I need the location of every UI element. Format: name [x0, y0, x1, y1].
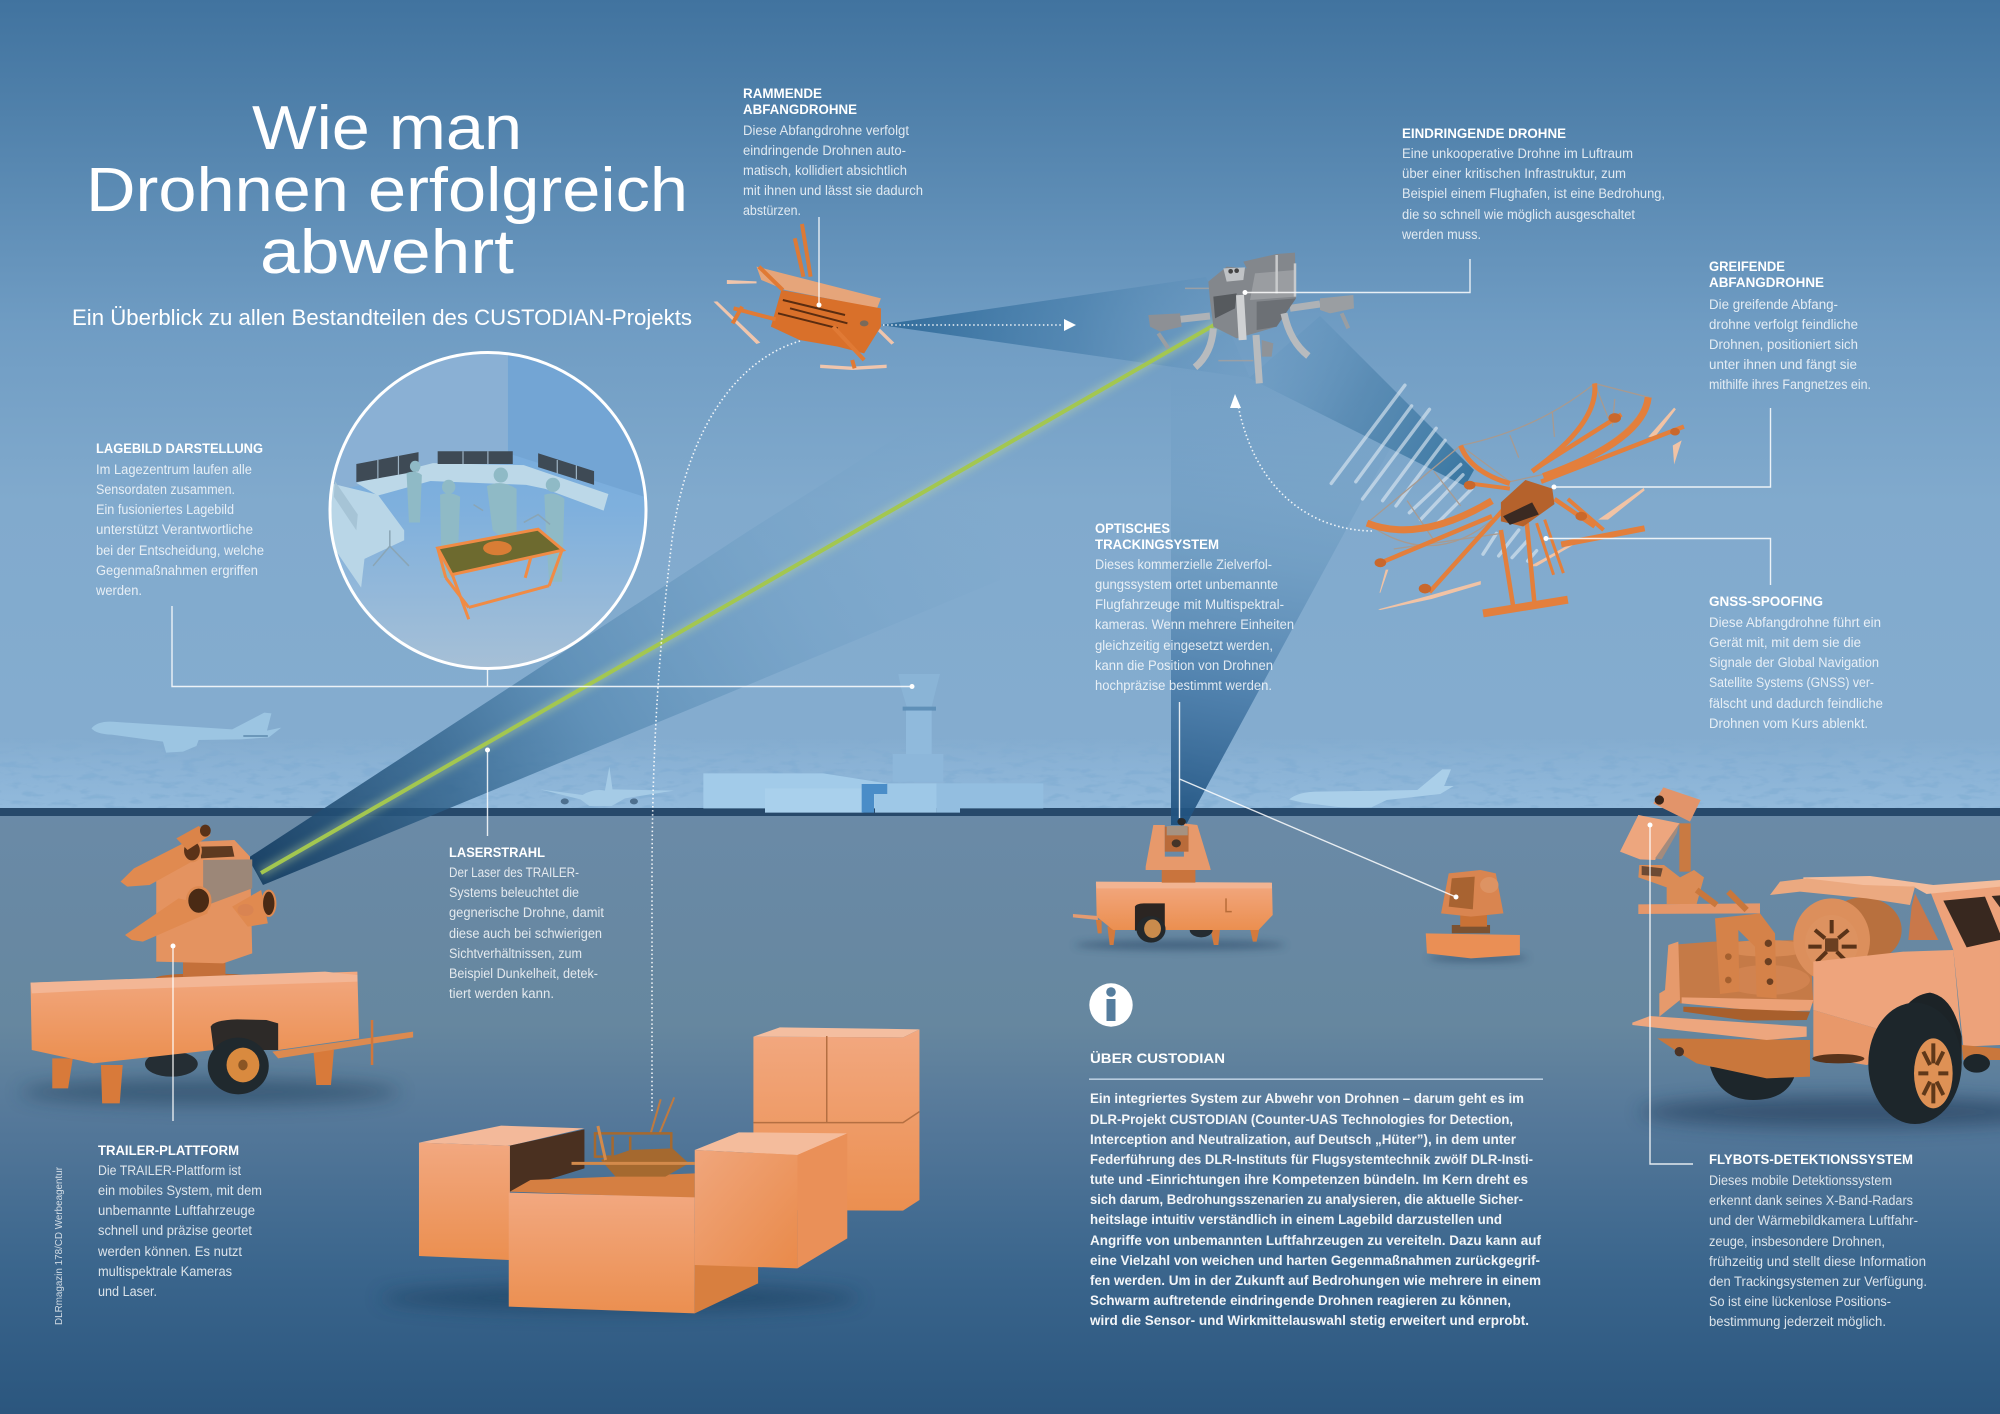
text: GNSS-Spoofing: Signale der Global Navigation — [1709, 655, 1879, 670]
pickup truck shadow — [1640, 1096, 2000, 1128]
drone: ramming interceptor — [713, 224, 894, 370]
text: Lagebild Darstellung: Gegenmaßnahmen ergriffen — [96, 563, 258, 578]
title: Wie man — [252, 94, 522, 163]
text: Optisches Trackingsystem: OPTISCHES — [1095, 521, 1170, 536]
text: GNSS-Spoofing — [1709, 594, 1883, 731]
turret — [121, 825, 275, 983]
drone: net-capturing interceptor — [1367, 383, 1684, 613]
right box — [695, 1132, 847, 1268]
airport terminal and tower — [703, 674, 1043, 813]
text: Eindringende Drohne: EINDRINGENDE DROHNE — [1402, 126, 1566, 141]
text: Trailer-Plattform: Die TRAILER-Plattform ist — [98, 1163, 241, 1178]
text: Lagebild Darstellung — [95, 441, 264, 598]
horizon band — [0, 808, 2000, 816]
center trailer shadow — [1075, 940, 1285, 950]
body text: sich darum, Bedrohungsszenarien zu analysieren, die aktuelle Sicher- — [1090, 1192, 1523, 1207]
trailer platform shadow — [20, 1079, 400, 1105]
text: Trailer-Plattform: unbemannte Luftfahrzeuge — [98, 1203, 255, 1218]
text: Greifende Abfangdrohne: Drohnen, positioniert sich — [1709, 337, 1858, 352]
body text: Ein integriertes System zur Abwehr von Drohnen – darum geht es im — [1090, 1091, 1524, 1106]
trailer body — [31, 972, 413, 1103]
ground background — [0, 815, 2000, 1414]
text: Eindringende Drohne: werden muss. — [1401, 227, 1481, 242]
text: Greifende Abfangdrohne — [1709, 259, 1871, 392]
body text: Schwarm auftretende eindringende Drohnen reagieren zu können, — [1090, 1293, 1511, 1308]
text: Trailer-Plattform: multispektrale Kameras — [98, 1264, 232, 1279]
left box — [419, 1126, 584, 1260]
text: Eindringende Drohne: die so schnell wie möglich ausgeschaltet — [1402, 207, 1635, 222]
text: Rammende Abfangdrohne: Diese Abfangdrohne verfolgt — [743, 123, 909, 138]
text: Lagebild Darstellung: Sensordaten zusammen. — [96, 482, 235, 497]
body text: fen werden. Um in der Zukunft auf Bedrohungen wie mehrere in einem — [1090, 1273, 1541, 1288]
text: Optisches Trackingsystem: kann die Position von Drohnen — [1095, 658, 1273, 673]
text: Flybots-Detektionssystem: erkennt dank seines X-Band-Radars — [1709, 1193, 1913, 1208]
text: Trailer-Plattform: ein mobiles System, mit dem — [98, 1183, 262, 1198]
text: GNSS-Spoofing: fälscht und dadurch feindliche — [1709, 696, 1883, 711]
text: Lagebild Darstellung: LAGEBILD DARSTELLUNG — [96, 441, 263, 456]
text: Laserstrahl: LASERSTRAHL — [449, 845, 545, 860]
text: Flybots-Detektionssystem: und der Wärmebildkamera Luftfahr- — [1709, 1213, 1918, 1228]
text: Greifende Abfangdrohne: ABFANGDROHNE — [1709, 275, 1824, 290]
subtitle: Ein Überblick zu allen Bestandteilen des CUSTODIAN-Projekts — [72, 305, 692, 330]
text: Rammende Abfangdrohne: RAMMENDE — [743, 86, 822, 101]
center trailer with tracking system — [1073, 818, 1273, 945]
text: GNSS-Spoofing: GNSS-SPOOFING — [1709, 594, 1823, 609]
body text: Interception and Neutralization, auf Deutsch „Hüter”), in dem unter — [1090, 1132, 1517, 1147]
laser beam — [261, 313, 1235, 873]
text: Greifende Abfangdrohne: GREIFENDE — [1709, 259, 1785, 274]
sky background — [0, 0, 2000, 810]
dotted arrow: net drone to target — [1230, 394, 1372, 531]
text: Flybots-Detektionssystem: zeuge, insbesondere Drohnen, — [1709, 1234, 1885, 1249]
text: Flybots-Detektionssystem: frühzeitig und stellt diese Information — [1709, 1254, 1926, 1269]
shipping boxes shadow — [380, 1284, 860, 1312]
text: Flybots-Detektionssystem: FLYBOTS-DETEKTIONSSYSTEM — [1709, 1152, 1913, 1167]
city skyline haze — [0, 782, 2000, 808]
small tracking turret shadow — [1428, 954, 1528, 962]
text: Lagebild Darstellung: werden. — [95, 583, 142, 598]
text: Eindringende Drohne — [1401, 126, 1665, 242]
credit line: DLRmagazin 178/CD Werbeagentur — [54, 1166, 65, 1325]
launch platform and stowed drone — [510, 1097, 695, 1198]
text: Laserstrahl: tiert werden kann. — [449, 986, 554, 1001]
text: Greifende Abfangdrohne: drohne verfolgt feindliche — [1709, 317, 1858, 332]
text: Greifende Abfangdrohne: Die greifende Abfang- — [1709, 297, 1838, 312]
text: Optisches Trackingsystem: TRACKINGSYSTEM — [1095, 537, 1219, 552]
text: Greifende Abfangdrohne: mithilfe ihres Fangnetzes ein. — [1709, 377, 1871, 392]
text: Trailer-Plattform: schnell und präzise geortet — [98, 1223, 252, 1238]
interceptor launch boxes — [419, 1027, 919, 1313]
text: Trailer-Plattform: werden können. Es nutzt — [97, 1244, 242, 1259]
body text: tute und -Einrichtungen ihre Kompetenzen bündeln. Im Kern dreht es — [1090, 1172, 1528, 1187]
text: Laserstrahl — [449, 845, 604, 1001]
text: Laserstrahl: Der Laser des TRAILER- — [449, 865, 579, 880]
body text: wird die Sensor- und Wirkmittelauswahl stetig erweitert und erprobt. — [1089, 1313, 1529, 1328]
text: Laserstrahl: diese auch bei schwierigen — [449, 926, 602, 941]
text: Eindringende Drohne: Eine unkooperative Drohne im Luftraum — [1402, 146, 1633, 161]
text: Flybots-Detektionssystem: So ist eine lückenlose Positions- — [1709, 1294, 1891, 1309]
text: GNSS-Spoofing: Satellite Systems (GNSS) ver- — [1709, 675, 1874, 690]
text: GNSS-Spoofing: Diese Abfangdrohne führt ein — [1709, 615, 1881, 630]
text: Flybots-Detektionssystem: Dieses mobile Detektionssystem — [1709, 1173, 1892, 1188]
back box — [753, 1027, 919, 1211]
body text — [1089, 1091, 1541, 1328]
text: Rammende Abfangdrohne: eindringende Drohnen auto- — [743, 143, 906, 158]
title: abwehrt — [260, 218, 514, 287]
circle outline — [330, 352, 646, 668]
text: Rammende Abfangdrohne: matisch, kollidiert absichtlich — [743, 163, 907, 178]
text: GNSS-Spoofing: Gerät mit, mit dem sie die — [1709, 635, 1861, 650]
text: Flybots-Detektionssystem — [1709, 1152, 1927, 1329]
airplane in flight — [92, 713, 281, 753]
body text: DLR-Projekt CUSTODIAN (Counter-UAS Technologies for Detection, — [1090, 1112, 1513, 1127]
beam: optical tracker cone — [1171, 362, 1392, 825]
beam: ramming drone to target — [880, 277, 1250, 378]
title — [86, 94, 688, 287]
heading: Über Custodian: ÜBER CUSTODIAN — [1090, 1051, 1225, 1066]
text: Lagebild Darstellung: Im Lagezentrum laufen alle — [96, 462, 252, 477]
text: Optisches Trackingsystem: gungssystem ortet unbemannte — [1095, 577, 1278, 592]
beam: target to net drone — [1249, 316, 1474, 486]
text: Optisches Trackingsystem: Flugfahrzeuge mit Multispektral- — [1095, 597, 1284, 612]
panel: situation room circle — [325, 349, 651, 673]
text: Flybots-Detektionssystem: den Trackingsystemen zur Verfügung. — [1709, 1274, 1927, 1289]
stripes: net drone countermeasure — [1331, 385, 1537, 561]
text: Eindringende Drohne: Beispiel einem Flughafen, ist eine Bedrohung, — [1402, 186, 1665, 201]
text: Optisches Trackingsystem: kameras. Wenn mehrere Einheiten — [1095, 617, 1294, 632]
title: Drohnen erfolgreich — [86, 156, 688, 225]
drone: intruding target — [1148, 253, 1354, 383]
text: GNSS-Spoofing: Drohnen vom Kurs ablenkt. — [1709, 716, 1868, 731]
body text: eine Vielzahl von weichen und harten Gegenmaßnahmen zurückgegrif- — [1090, 1253, 1540, 1268]
text: Laserstrahl: Sichtverhältnissen, zum — [449, 946, 582, 961]
text: Optisches Trackingsystem: Dieses kommerzielle Zielverfol- — [1095, 557, 1272, 572]
text: Flybots-Detektionssystem: bestimmung jederzeit möglich. — [1709, 1314, 1886, 1329]
text: Greifende Abfangdrohne: unter ihnen und fängt sie — [1709, 357, 1857, 372]
small tracking turret — [1426, 870, 1520, 958]
dotted arrow: ramming drone to target — [883, 319, 1076, 331]
airplane on runway — [540, 767, 674, 806]
text: Trailer-Plattform — [97, 1143, 262, 1299]
text: Laserstrahl: gegnerische Drohne, damit — [449, 905, 604, 920]
text: Lagebild Darstellung: unterstützt Verantwortliche — [96, 522, 253, 537]
icon: info — [1089, 983, 1133, 1027]
text: Lagebild Darstellung: Ein fusioniertes Lagebild — [96, 502, 234, 517]
room interior — [325, 349, 651, 673]
panel: Über Custodian — [1089, 983, 1543, 1328]
text: Laserstrahl: Systems beleuchtet die — [449, 885, 579, 900]
text: Trailer-Plattform: und Laser. — [98, 1284, 157, 1299]
text: Optisches Trackingsystem — [1095, 521, 1294, 693]
trailer platform with laser turret — [121, 825, 275, 983]
airplane on ground right — [1289, 769, 1454, 807]
text: Rammende Abfangdrohne — [743, 86, 923, 218]
text: Lagebild Darstellung: bei der Entscheidung, welche — [96, 543, 264, 558]
text: Optisches Trackingsystem: hochpräzise bestimmt werden. — [1095, 678, 1272, 693]
text: Laserstrahl: Beispiel Dunkelheit, detek- — [449, 966, 598, 981]
text: Rammende Abfangdrohne: abstürzen. — [743, 203, 801, 218]
center box — [509, 1193, 758, 1313]
text: Rammende Abfangdrohne: ABFANGDROHNE — [743, 102, 857, 117]
text: Eindringende Drohne: über einer kritischen Infrastruktur, zum — [1402, 166, 1626, 181]
body text: Angriffe von unbemannten Luftfahrzeugen zu vereiteln. Dazu kann auf — [1090, 1233, 1541, 1248]
body text: Federführung des DLR-Instituts für Flugsystemtechnik zwölf DLR-Insti- — [1090, 1152, 1533, 1167]
beam: laser cone from trailer — [248, 372, 1000, 885]
text: Trailer-Plattform: TRAILER-PLATTFORM — [98, 1143, 239, 1158]
text: Optisches Trackingsystem: gleichzeitig eingesetzt werden, — [1095, 638, 1273, 653]
dotted path: ramming drone launch — [652, 341, 800, 1112]
pickup truck with detection system — [1620, 787, 2000, 1124]
body text: heitslage intuitiv verständlich in einem Lagebild darzustellen und — [1090, 1212, 1502, 1227]
leader lines — [170, 217, 1770, 1164]
text: Rammende Abfangdrohne: mit ihnen und lässt sie dadurch — [743, 183, 923, 198]
